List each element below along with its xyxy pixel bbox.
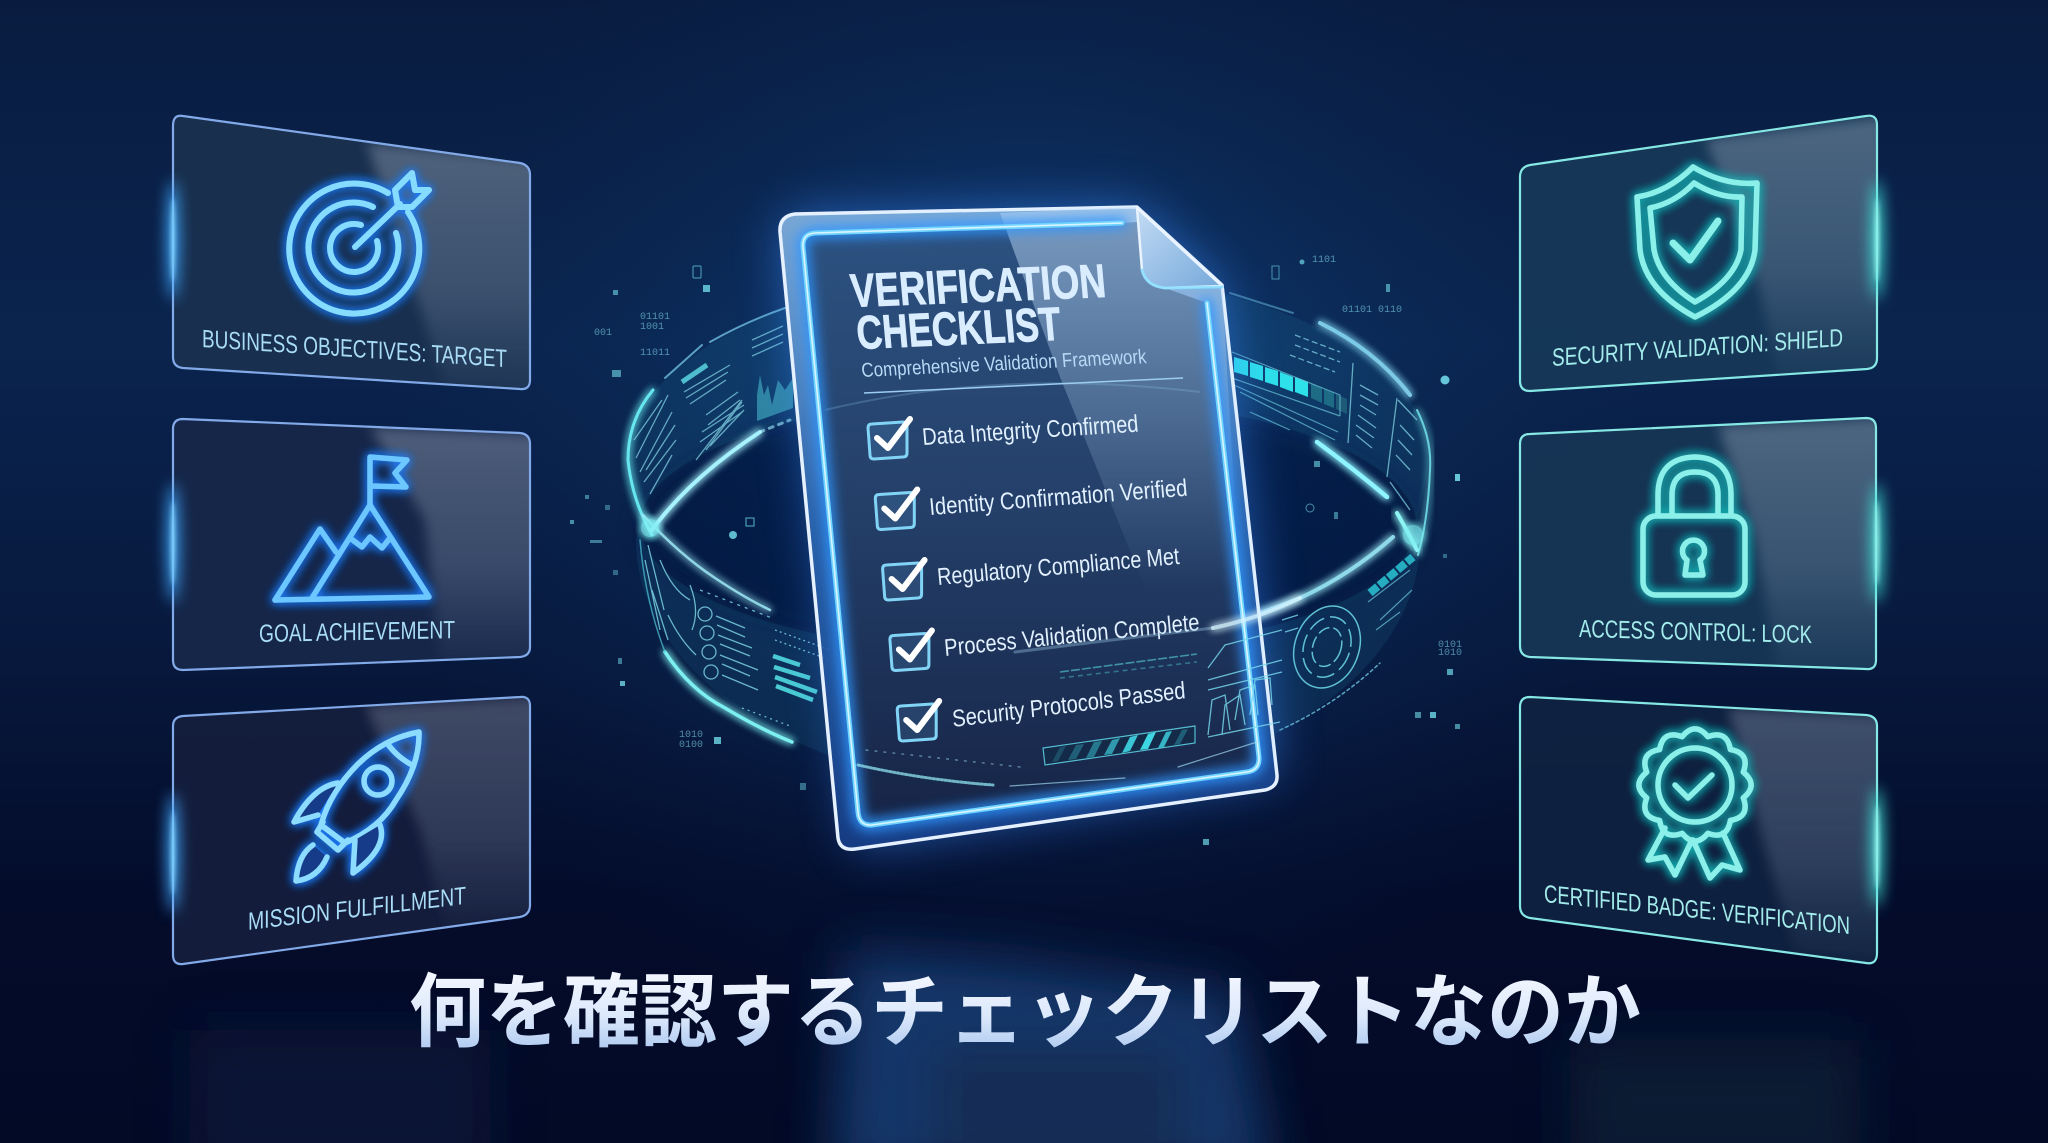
circuit traces — [1208, 615, 1298, 737]
right front hud: concentric dial — [1283, 597, 1371, 697]
neon frame — [803, 223, 1259, 825]
binary readouts: 1001 — [640, 322, 664, 333]
striped progress bar — [1043, 726, 1195, 765]
panel: access control — [1520, 418, 1885, 672]
document title — [848, 254, 1108, 359]
binary readouts: 001 — [594, 328, 612, 339]
icon: target — [289, 173, 429, 314]
icon: shield — [1637, 167, 1757, 317]
document body — [780, 207, 1277, 849]
ring glowing arcs — [628, 293, 1430, 742]
label: mission fulfillment: MISSION FULFILLMENT — [248, 882, 466, 936]
binary readouts: 1101 — [1312, 255, 1336, 266]
left front hud panel — [645, 545, 830, 726]
divider — [864, 378, 1183, 393]
binary readouts: 1010 — [679, 730, 703, 741]
floor reflection — [190, 950, 1860, 1143]
label: business objectives: BUSINESS OBJECTIVES: TARGET — [202, 325, 507, 373]
checklist item 1: Data Integrity Confirmed — [921, 411, 1140, 451]
binary readouts: 01101 0110 — [1342, 305, 1402, 316]
document inner area — [803, 222, 1259, 825]
binary readouts: 01101 — [640, 312, 670, 323]
checklist item 5: Security Protocols Passed — [951, 677, 1187, 733]
right back progress bar — [1232, 352, 1347, 440]
icon: padlock — [1643, 457, 1745, 595]
label: security validation: SECURITY VALIDATION: SHIELD — [1552, 324, 1843, 372]
document subtitle: Comprehensive Validation Framework — [860, 346, 1148, 382]
checklist item 2 — [875, 475, 1189, 530]
checklist item 5 — [897, 677, 1187, 741]
icon: mountain with flag — [275, 457, 429, 600]
title: 何を確認するチェックリストなのか — [409, 968, 1641, 1057]
ring interior shade — [643, 397, 1413, 653]
document title: VERIFICATION — [848, 254, 1108, 317]
checklist item 3 — [883, 543, 1181, 600]
binary readouts: 11011 — [640, 348, 670, 359]
hud fine text lines — [1060, 654, 1197, 678]
right front hud: teal meter — [1368, 557, 1413, 630]
document glow — [780, 207, 1277, 849]
glass shine — [1000, 207, 1240, 593]
label: goal achievement: GOAL ACHIEVEMENT — [259, 616, 455, 648]
panel: certified badge — [1520, 697, 1885, 965]
icon: rosette badge — [1639, 729, 1751, 878]
panel: goal achievement — [167, 419, 540, 670]
checklist item 1 — [868, 411, 1140, 459]
checklist item 3: Regulatory Compliance Met — [936, 543, 1181, 591]
right back hud panels — [1290, 335, 1417, 510]
icon: rocket — [294, 732, 419, 881]
particles — [570, 260, 1460, 845]
document title: CHECKLIST — [854, 297, 1063, 359]
holographic ring — [570, 255, 1462, 845]
label: access control: ACCESS CONTROL: LOCK — [1579, 615, 1812, 649]
panel: security validation — [1520, 116, 1885, 391]
page fold — [1137, 208, 1222, 288]
left back hud panel — [634, 326, 793, 494]
binary readouts: 0100 — [679, 740, 703, 751]
binary readouts — [594, 255, 1462, 751]
binary readouts: 1010 — [1438, 648, 1462, 659]
ring streak through glass — [825, 383, 1200, 410]
checklist document — [780, 207, 1300, 849]
checklist item 2: Identity Confirmation Verified — [928, 475, 1189, 521]
binary readouts: 0101 — [1438, 640, 1462, 651]
panel: business objectives — [167, 116, 540, 395]
checklist item 4 — [890, 609, 1201, 670]
checklist item 4: Process Validation Complete — [943, 609, 1201, 662]
label: certified badge: CERTIFIED BADGE: VERIFICATION — [1544, 880, 1850, 940]
panel: mission fulfillment — [167, 697, 540, 964]
ring edge through glass — [858, 598, 1300, 786]
ring band fills — [628, 270, 1430, 790]
